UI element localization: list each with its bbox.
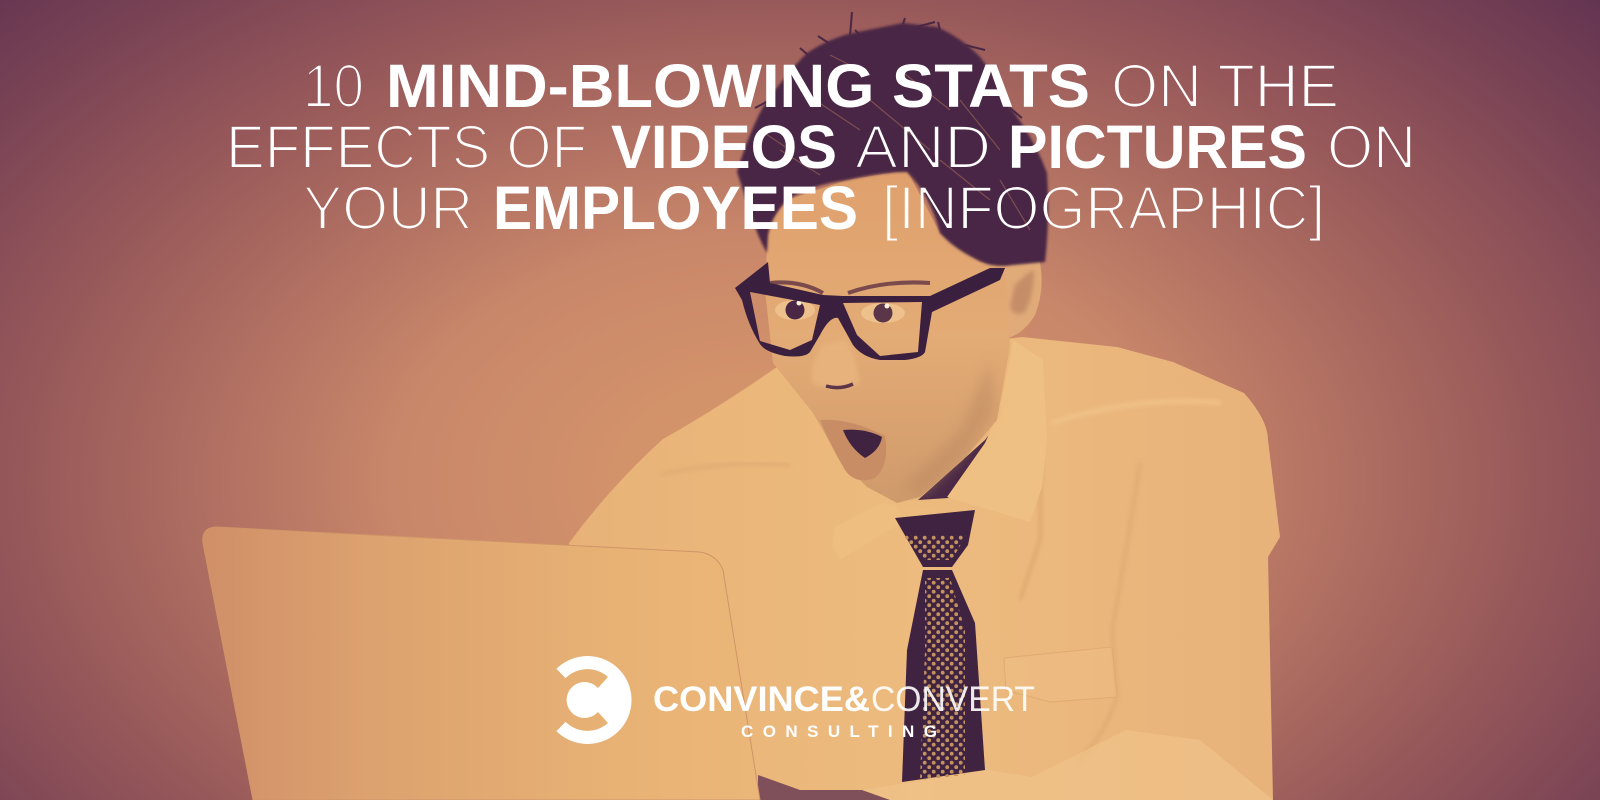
shirt collar xyxy=(832,340,1047,560)
shirt xyxy=(560,337,1280,800)
title line 3: YOUR xyxy=(303,174,473,242)
logo wordmark light: CONVERT xyxy=(871,680,1035,719)
ear xyxy=(995,260,1042,340)
logo: Convince & Convert Consulting xyxy=(556,656,1035,744)
glasses xyxy=(735,262,1005,360)
title line 2: VIDEOS xyxy=(611,113,837,181)
title line 2: PICTURES xyxy=(1008,113,1307,181)
jaw shading xyxy=(900,360,995,495)
icon: C mark xyxy=(556,656,632,744)
hair xyxy=(737,12,1048,266)
hand at keyboard xyxy=(758,775,890,800)
eyes xyxy=(775,300,905,323)
title xyxy=(226,52,1416,242)
nose xyxy=(812,340,860,388)
logo wordmark: CONVINCE& xyxy=(653,680,870,719)
title line 1: MIND-BLOWING STATS xyxy=(386,52,1090,120)
open mouth xyxy=(820,420,886,480)
title line 1 xyxy=(303,52,1339,120)
title line 1: 10 xyxy=(303,52,364,120)
laptop lid xyxy=(203,527,760,800)
title line 1: ON THE xyxy=(1111,52,1339,120)
title line 2 xyxy=(226,113,1416,181)
face xyxy=(765,170,1010,503)
title line 3: EMPLOYEES xyxy=(493,174,858,242)
photo: surprised man at laptop xyxy=(203,12,1280,800)
neck shadow xyxy=(918,420,1010,500)
title line 2: EFFECTS OF xyxy=(226,113,587,181)
title line 2: AND xyxy=(855,113,991,181)
title line 3 xyxy=(303,174,1325,242)
title line 2: ON xyxy=(1327,113,1416,181)
title line 3: [INFOGRAPHIC] xyxy=(882,174,1325,242)
tie xyxy=(895,510,985,782)
logo subline: CONSULTING xyxy=(741,722,937,741)
eyebrows xyxy=(770,282,930,293)
